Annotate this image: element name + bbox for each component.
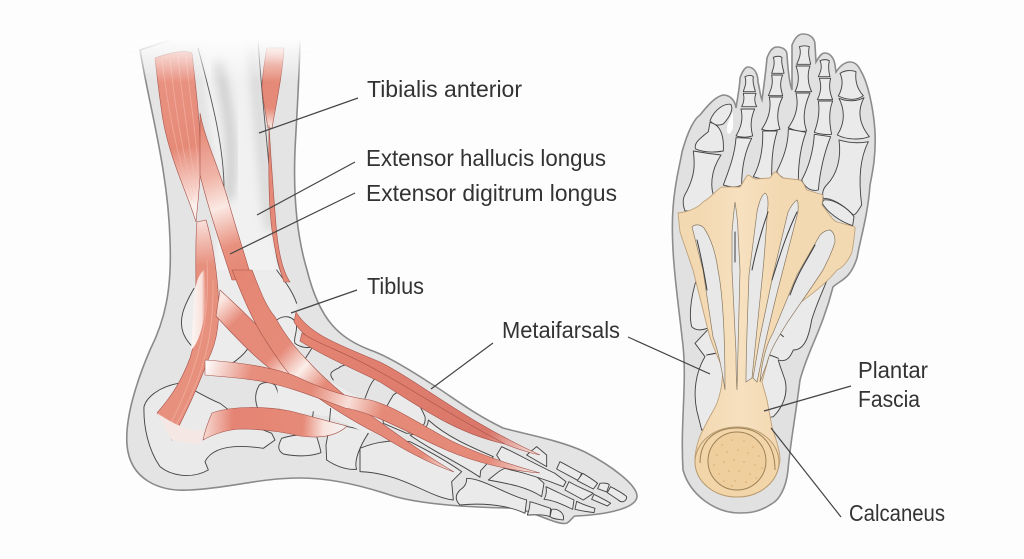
label: Extensor hallucis longus: Extensor hallucis longus bbox=[366, 145, 606, 171]
muscle: tibialis anterior upper bbox=[262, 48, 284, 128]
bone: navicular bbox=[256, 382, 280, 420]
bones of ankle, heel and midfoot bbox=[144, 270, 380, 476]
bone: midfoot block bbox=[277, 383, 380, 433]
fade at top of leg bbox=[130, 20, 310, 82]
muscle: mid-foot band to toes bbox=[205, 360, 540, 473]
muscle: plantar abductor bbox=[203, 407, 347, 440]
panel: side view of foot and lower leg bbox=[127, 20, 637, 524]
bones: second toe bbox=[488, 468, 544, 497]
tendon fan at heel bbox=[157, 413, 205, 445]
lower foot bones bbox=[690, 270, 828, 430]
toe gap bbox=[727, 112, 733, 134]
bone: malleolus joint bbox=[277, 317, 377, 373]
bones: second toe bbox=[743, 75, 755, 92]
bones: big toe phalanges bbox=[456, 478, 527, 513]
bone lines inside slits bbox=[697, 212, 815, 295]
plantar fascia bbox=[678, 172, 855, 497]
tendons: dorsal extensors bbox=[294, 312, 540, 455]
bone: cuneiform bbox=[326, 423, 368, 469]
label: Plantar Fascia: Plantar bbox=[858, 357, 928, 383]
bone: cuboid bbox=[279, 435, 321, 456]
bones: fifth toe bbox=[818, 60, 830, 77]
label: Plantar Fascia: Fascia bbox=[858, 386, 920, 412]
muscles bbox=[155, 48, 540, 473]
muscle: long extensor to toes bbox=[232, 270, 454, 472]
label: Calcaneus: Calcaneus bbox=[849, 500, 945, 526]
bones: midfoot and metatarsal blocks bbox=[383, 391, 425, 433]
muscle: lower leg vertical belly bbox=[157, 220, 219, 440]
bones: fourth toe bbox=[527, 447, 547, 467]
bones: third toe bbox=[772, 56, 784, 73]
label: Tiblus: Tiblus bbox=[367, 273, 424, 299]
tendon: tibialis anterior lower bbox=[269, 125, 290, 282]
skin outline of leg and foot bbox=[127, 30, 637, 524]
leader lines bbox=[230, 98, 851, 517]
bones: little toe bbox=[710, 104, 732, 125]
calcaneus fat pad with dots bbox=[708, 432, 766, 490]
muscle: gastrocnemius upper bbox=[155, 52, 201, 222]
heel pad bbox=[695, 427, 779, 497]
muscle: extensor digitorum tendon upper bbox=[200, 113, 252, 280]
bones: fifth toe bbox=[607, 487, 627, 502]
muscle: peroneus band bbox=[216, 290, 296, 380]
label: Tibialis anterior: Tibialis anterior bbox=[367, 76, 522, 102]
label: Extensor digitrum longus: Extensor digitrum longus bbox=[366, 180, 617, 206]
label: Metaifarsals: Metaifarsals bbox=[502, 317, 620, 343]
bones: third toe bbox=[497, 447, 566, 487]
skin outline of sole bbox=[672, 34, 875, 513]
fascia slits showing bones bbox=[692, 193, 835, 390]
label: Plantar Fascia bbox=[858, 357, 928, 412]
tibia shaft bbox=[200, 34, 290, 345]
bone: calcaneus bbox=[144, 383, 275, 476]
bones of forefoot and toes bbox=[360, 391, 627, 520]
bones: big toe bbox=[838, 71, 863, 99]
metatarsal and toe bones bbox=[683, 46, 869, 226]
bones: fourth toe bbox=[797, 46, 811, 64]
panel: plantar view of foot bbox=[672, 34, 875, 513]
bone: talus and ankle region bbox=[181, 270, 300, 365]
